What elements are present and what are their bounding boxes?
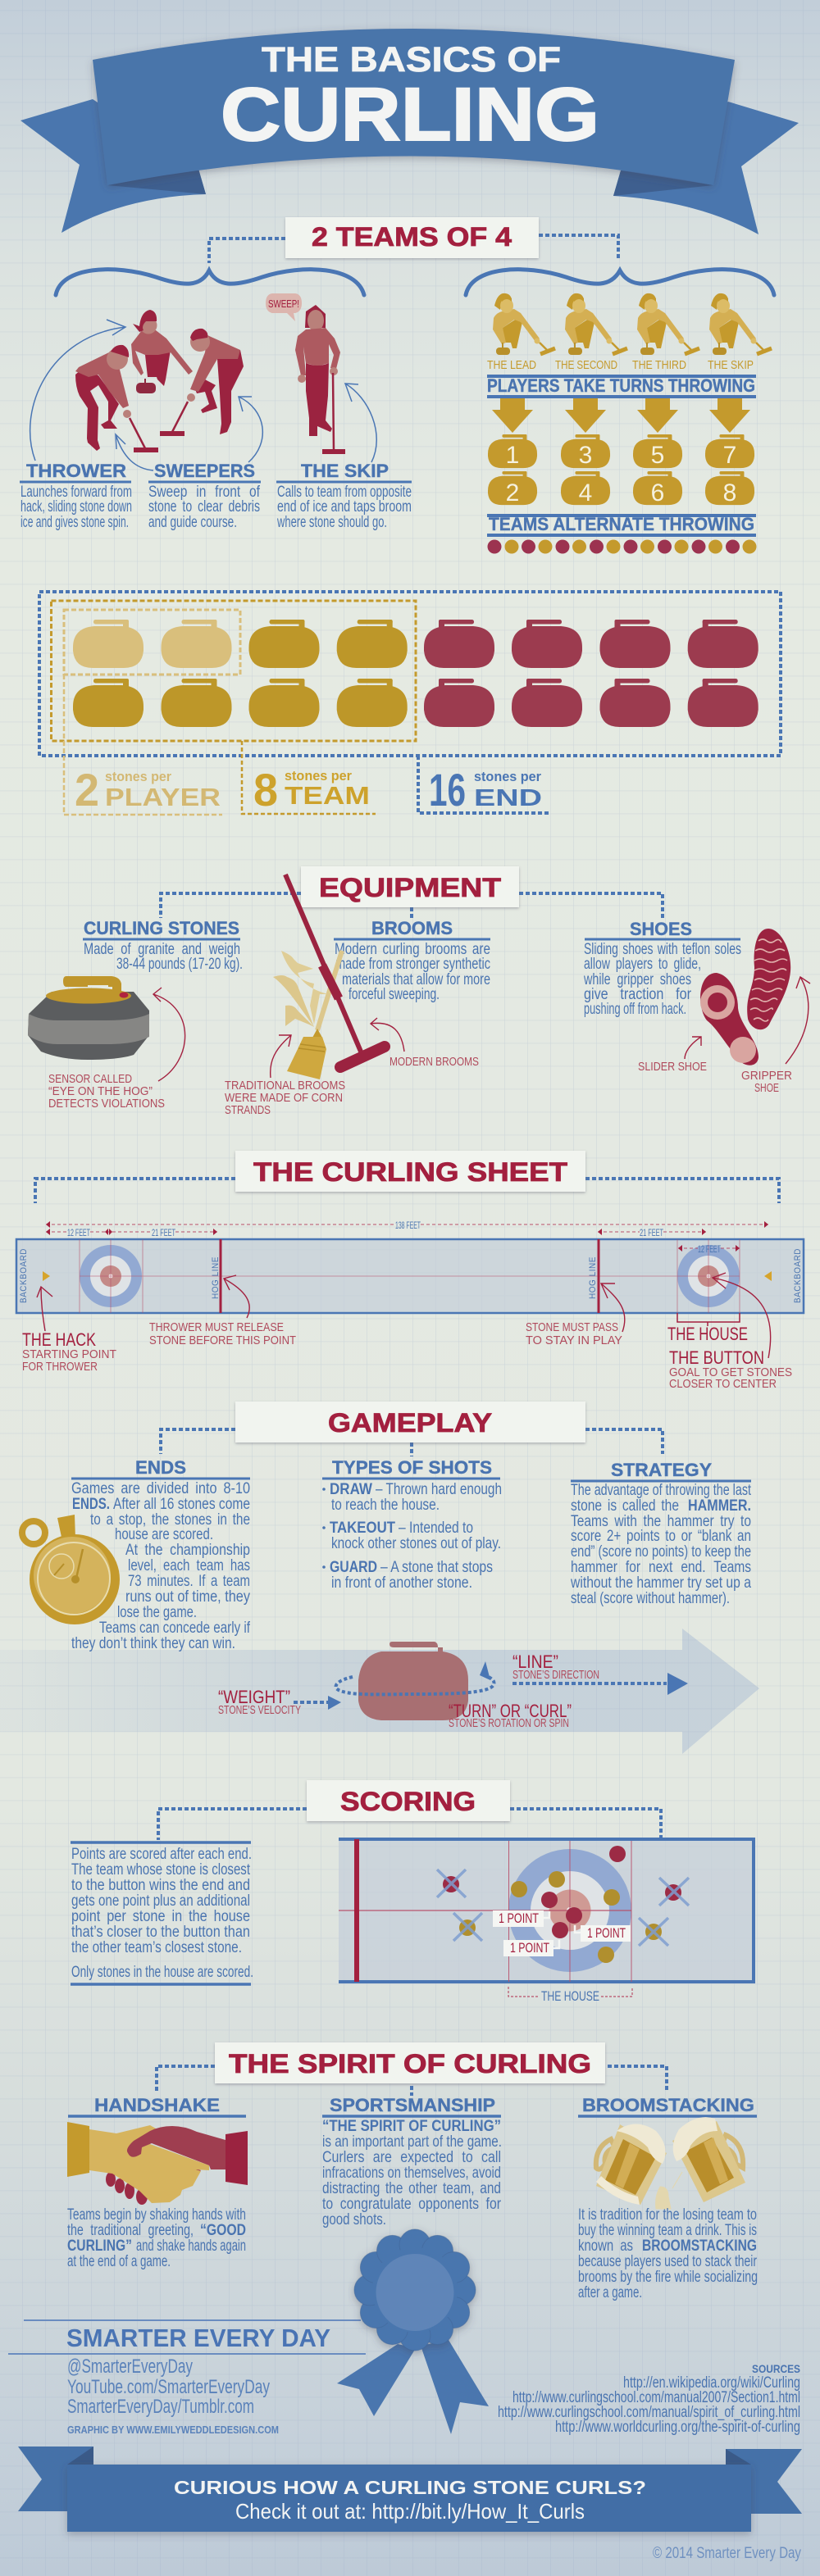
bottom banner xyxy=(18,2447,802,2532)
stat: 8 stones per team xyxy=(253,764,370,816)
text: the skip: THE SKIP xyxy=(301,461,389,481)
callout: traditional brooms: TRADITIONAL BROOMS xyxy=(225,1079,345,1093)
text: types of shots xyxy=(322,1457,502,1592)
text: strategy: Teams with the hammer try to xyxy=(571,1513,751,1530)
text: contact links: SmarterEveryDay/Tumblr.com xyxy=(67,2396,254,2418)
text: sportsmanship: is an important part of the game. xyxy=(322,2133,502,2151)
icon: stopwatch xyxy=(22,1515,120,1624)
text: shoes: allow players to glide, xyxy=(584,956,701,973)
callout: the button: THE BUTTON xyxy=(669,1347,764,1368)
numbered stones: 2 xyxy=(506,479,519,507)
curly brace right xyxy=(466,270,774,295)
label: the house: THE HOUSE xyxy=(541,1988,599,2004)
banner text: Check it out at: http://bit.ly/How_It_Curls xyxy=(235,2499,585,2524)
stat: 2 stones per player xyxy=(75,764,221,816)
house width dimension xyxy=(678,1243,740,1255)
text: ends: Teams can concede early if xyxy=(99,1620,251,1637)
text: brooms xyxy=(334,918,490,1003)
dimension lines: 21 FEET xyxy=(640,1227,663,1238)
text: handshake heading: HANDSHAKE xyxy=(94,2095,220,2115)
callout: modern brooms: MODERN BROOMS xyxy=(390,1055,479,1069)
stat: 16 stones per end: stones per xyxy=(474,769,541,784)
text: brooms: forceful sweeping. xyxy=(348,986,440,1003)
callout: the button xyxy=(669,1273,792,1391)
heading: teams alternate throwing: TEAMS ALTERNATE THROWING xyxy=(489,514,754,534)
callout: stone must pass: TO STAY IN PLAY xyxy=(526,1333,622,1347)
text: types of shots: – Thrown hard enough xyxy=(376,1481,502,1498)
heading: gameplay xyxy=(161,1402,663,1456)
text: curling stones xyxy=(83,918,243,973)
callout: turn or curl: “TURN” OR “CURL” xyxy=(449,1701,572,1721)
callout: slider shoe xyxy=(638,1037,707,1074)
numbered stones: 5 xyxy=(651,442,664,469)
text: types of shots: knock other stones out of play. xyxy=(331,1535,501,1552)
text: sweepers: SWEEPERS xyxy=(154,461,255,481)
callout: weight: “WEIGHT” xyxy=(218,1687,290,1707)
out of house crosses xyxy=(437,1870,689,1946)
text: shoes: pushing off from hack. xyxy=(584,1001,686,1018)
text: ends: runs out of time, they xyxy=(125,1588,250,1606)
text: sportsmanship: “THE SPIRIT OF CURLING” xyxy=(322,2118,501,2135)
heading: the curling sheet: THE CURLING SHEET xyxy=(253,1157,568,1187)
callout: eye on the hog: SENSOR CALLED xyxy=(48,1072,132,1086)
title text xyxy=(221,40,599,157)
callout: the house: THE HOUSE xyxy=(667,1324,748,1344)
callout: the button: CLOSER TO CENTER xyxy=(669,1377,777,1391)
text: strategy: end” (score no points) to keep the xyxy=(571,1543,751,1561)
text: shoes: Sliding shoes with teflon soles xyxy=(584,941,741,958)
icon: beer mugs xyxy=(596,2117,745,2209)
callout: the hack: FOR THROWER xyxy=(22,1360,98,1374)
figure: sweeper one xyxy=(131,310,193,393)
text: scoring rules xyxy=(71,1842,253,1984)
text: scoring rules: point per stone in the house xyxy=(71,1908,250,1925)
title text: THE BASICS OF xyxy=(262,40,561,80)
team figures: THE LEAD xyxy=(487,358,536,372)
alternating stones row xyxy=(487,539,756,554)
text: the skip: Calls to team from opposite xyxy=(277,484,412,501)
text: broomstacking: known as xyxy=(578,2238,633,2255)
hog line labels: BACKBOARD xyxy=(19,1248,29,1303)
banner text: CURIOUS HOW A CURLING STONE CURLS? xyxy=(174,2477,646,2498)
callout: the hack: THE HACK xyxy=(22,1329,96,1350)
direction arrow background xyxy=(0,1629,759,1754)
one point labels: 1 POINT xyxy=(587,1925,626,1941)
callout: release before hog line: STONE BEFORE THIS POINT xyxy=(149,1333,296,1347)
text: thrower: THROWER xyxy=(26,461,126,481)
icon: blue ribbon rosette xyxy=(337,2229,489,2434)
text: sportsmanship xyxy=(322,2095,502,2228)
text: scoring rules: gets one point plus an additional xyxy=(71,1892,250,1910)
text: shoes: while gripper shoes xyxy=(583,971,691,988)
text: sweepers: and guide course. xyxy=(148,514,237,531)
callout: gripper shoe: GRIPPER xyxy=(741,1069,792,1083)
text: ends: After all 16 stones come xyxy=(113,1496,250,1513)
callout: line xyxy=(512,1651,688,1695)
text: sportsmanship: Curlers are expected to call xyxy=(322,2149,501,2166)
text: sportsmanship: distracting the other team, and xyxy=(322,2180,501,2197)
text: scoring rules: that’s closer to the button than xyxy=(71,1924,250,1941)
text: handshake xyxy=(67,2206,246,2270)
callout: eye on the hog: DETECTS VIOLATIONS xyxy=(48,1097,165,1111)
text: broomstacking: BROOMSTACKING xyxy=(642,2238,757,2255)
text: ends: Games are divided into 8-10 xyxy=(71,1480,250,1497)
diagram: scoring house xyxy=(339,1839,754,1982)
dimension lines xyxy=(46,1220,768,1238)
text: contact links: YouTube.com/SmarterEveryDay xyxy=(67,2376,270,2398)
text: types of shots: GUARD xyxy=(330,1559,377,1576)
house: right xyxy=(677,1245,740,1307)
text: scoring rules: the other team’s closest stone. xyxy=(71,1939,242,1956)
callout: weight xyxy=(218,1687,341,1717)
text: brooms: made from stronger synthetic xyxy=(335,956,490,973)
text: shoes xyxy=(583,919,741,1018)
text: handshake: Teams begin by shaking hands with xyxy=(67,2206,246,2224)
callout: line: “LINE” xyxy=(512,1651,558,1672)
text: handshake: and shake hands again xyxy=(136,2238,246,2255)
one point labels xyxy=(493,1910,631,1956)
icon: curling stone xyxy=(28,976,149,1060)
numbered stones: 8 xyxy=(723,479,736,507)
callout: turn or curl: STONE’S ROTATION OR SPIN xyxy=(449,1716,569,1730)
stat: 8 stones per team: TEAM xyxy=(285,781,370,810)
text: ends: lose the game. xyxy=(117,1604,197,1621)
text: sportsmanship: SPORTSMANSHIP xyxy=(330,2095,495,2115)
title text: CURLING xyxy=(221,73,599,157)
callout: stone must pass: STONE MUST PASS xyxy=(526,1320,618,1334)
callout: stone must pass xyxy=(526,1283,625,1347)
callout: traditional brooms: WERE MADE OF CORN xyxy=(225,1091,343,1105)
stat: 2 stones per player: PLAYER xyxy=(105,783,221,811)
numbered stones: 1 xyxy=(506,442,519,469)
text: shoes: give traction for xyxy=(584,986,692,1003)
text: broomstacking xyxy=(578,2206,758,2301)
text: ends: 73 minutes. If a team xyxy=(128,1573,250,1590)
text: contact links: @SmarterEveryDay xyxy=(67,2356,193,2378)
callout: weight: STONE’S VELOCITY xyxy=(218,1703,301,1717)
hog line labels: HOG LINE xyxy=(211,1256,221,1299)
text: strategy: stone is called the xyxy=(571,1497,679,1515)
brand: smarter every day xyxy=(8,2320,366,2354)
diagram: curling sheet xyxy=(16,1239,804,1313)
stat: 16 stones per end xyxy=(429,764,542,816)
text: sources xyxy=(498,2362,800,2436)
text: graphic credit: GRAPHIC BY WWW.EMILYWEDDLEDESIGN.COM xyxy=(67,2424,279,2436)
text: handshake: at the end of a game. xyxy=(67,2253,171,2270)
text: brooms: Modern curling brooms are xyxy=(335,941,490,958)
heading: the spirit of curling xyxy=(157,2042,667,2096)
team figures xyxy=(487,293,772,372)
text: ends: to a stop, the stones in the xyxy=(90,1511,250,1529)
text: strategy: HAMMER. xyxy=(688,1497,751,1515)
heading: scoring xyxy=(158,1780,661,1840)
stat: 2 stones per player: 2 xyxy=(75,764,99,816)
callout: traditional brooms: STRANDS xyxy=(225,1103,271,1117)
heading: the curling sheet xyxy=(35,1151,779,1203)
speech bubble: sweep: SWEEP! xyxy=(268,298,299,310)
house: left xyxy=(80,1245,142,1307)
text: types of shots: to reach the house. xyxy=(331,1497,440,1514)
callout: traditional brooms xyxy=(225,1035,345,1117)
label: the house xyxy=(508,1987,632,2004)
callout: slider shoe: SLIDER SHOE xyxy=(638,1060,707,1074)
figure: thrower xyxy=(75,345,158,452)
text: strategy: score 2+ points to or “blank an xyxy=(571,1528,751,1545)
icon: handshake xyxy=(67,2122,248,2205)
figure: sweeper two xyxy=(160,329,244,436)
text: ends: ENDS xyxy=(135,1457,186,1478)
text: the skip xyxy=(276,461,412,531)
heading: players take turns throwing: PLAYERS TAKE TURNS THROWING xyxy=(487,375,755,396)
callout: gripper shoe: SHOE xyxy=(754,1081,779,1095)
team figures: THE SECOND xyxy=(555,358,617,372)
text: broomstacking: after a game. xyxy=(578,2284,642,2301)
numbered stones: 3 xyxy=(579,442,592,469)
stat: 8 stones per team: stones per xyxy=(285,768,352,784)
numbered stones: 4 xyxy=(579,479,592,507)
text: broomstacking: brooms by the fire while socializing xyxy=(578,2269,758,2286)
text: ends: ENDS. xyxy=(72,1496,110,1513)
house width dimension: 12 FEET xyxy=(698,1243,721,1255)
callout: line: STONE’S DIRECTION xyxy=(512,1668,599,1682)
text: types of shots: TYPES OF SHOTS xyxy=(332,1457,492,1478)
heading: the spirit of curling: THE SPIRIT OF CURLING xyxy=(229,2049,591,2079)
banner text xyxy=(174,2477,646,2524)
text: strategy: hammer for next end. Teams xyxy=(571,1559,751,1576)
callout: turn or curl xyxy=(449,1701,572,1730)
text: handshake: “GOOD xyxy=(200,2222,246,2239)
text: types of shots: DRAW xyxy=(330,1481,372,1498)
figure: the skip xyxy=(295,305,345,454)
stones: team gold xyxy=(73,620,408,727)
heading: gameplay: GAMEPLAY xyxy=(328,1408,492,1438)
brand: smarter every day: SMARTER EVERY DAY xyxy=(66,2324,330,2352)
icon: slider shoe xyxy=(700,973,758,1065)
text: brooms: materials that allow for more xyxy=(342,971,490,988)
heading: scoring: SCORING xyxy=(340,1787,476,1816)
stat: 8 stones per team: 8 xyxy=(253,764,278,816)
hog line labels xyxy=(19,1248,803,1303)
callout: eye on the hog: “EYE ON THE HOG” xyxy=(48,1084,153,1098)
hog lines xyxy=(221,1239,599,1313)
text: ends: At the championship xyxy=(125,1542,250,1559)
dimension lines: 138 FEET xyxy=(395,1220,421,1231)
text: scoring rules: to the button wins the end and xyxy=(71,1877,250,1894)
stat: 16 stones per end: END xyxy=(474,785,542,811)
text: handshake: CURLING” xyxy=(67,2238,132,2255)
text: types of shots: – A stone that stops xyxy=(380,1559,493,1576)
heading: 2 teams of 4 xyxy=(209,217,618,263)
text: shoes: SHOES xyxy=(630,919,692,939)
text: ends: house are scored. xyxy=(115,1526,213,1543)
text: the skip: end of ice and taps broom xyxy=(277,498,412,516)
hog line labels: HOG LINE xyxy=(588,1256,598,1299)
text: broomstacking: because players used to stack their xyxy=(578,2253,757,2270)
icon: traditional corn broom xyxy=(273,951,342,1079)
text: broomstacking heading: BROOMSTACKING xyxy=(582,2095,754,2115)
title banner xyxy=(20,29,799,234)
icon: modern broom xyxy=(285,875,385,1067)
text: thrower xyxy=(20,461,132,531)
dimension lines: 21 FEET xyxy=(152,1227,175,1238)
text: ends: level, each team has xyxy=(128,1557,250,1574)
stat: 16 stones per end: 16 xyxy=(429,764,466,816)
text: strategy: STRATEGY xyxy=(611,1460,712,1480)
text: ends xyxy=(71,1457,251,1652)
callout: the hack: STARTING POINT xyxy=(22,1347,116,1361)
panel: stones per game diagram xyxy=(39,592,781,815)
callout: eye on the hog xyxy=(48,988,185,1111)
stones: player xyxy=(73,620,231,668)
crimson stones xyxy=(443,1846,681,1938)
text: the skip: where stone should go. xyxy=(276,514,387,531)
callout: gripper shoe xyxy=(741,977,810,1095)
numbered stones xyxy=(488,434,754,507)
callout: modern brooms xyxy=(371,1018,479,1069)
icon: gripper shoe xyxy=(747,929,790,1029)
hog line labels: BACKBOARD xyxy=(793,1248,803,1303)
text: strategy: The advantage of throwing the last xyxy=(571,1482,752,1499)
one point labels: 1 POINT xyxy=(510,1940,549,1956)
numbered stones: 6 xyxy=(651,479,664,507)
one point labels: 1 POINT xyxy=(499,1910,539,1926)
stones: opposing team crimson xyxy=(424,620,758,727)
text: curling stones: CURLING STONES xyxy=(84,918,239,938)
text: sources: SOURCES xyxy=(752,2362,800,2375)
text: strategy xyxy=(570,1460,752,1607)
text: thrower: Launches forward from xyxy=(20,484,132,501)
speech bubble: sweep xyxy=(266,293,302,321)
callout: the hack xyxy=(22,1287,116,1374)
team figures: THE THIRD xyxy=(632,358,686,372)
text: sweepers xyxy=(148,461,261,531)
icon: stone in motion xyxy=(336,1642,494,1720)
text: broomstacking: It is tradition for the losing team to xyxy=(578,2206,757,2224)
curly brace left xyxy=(56,270,364,295)
text: scoring rules: Points are scored after each end. xyxy=(71,1846,252,1863)
numbered stones: 7 xyxy=(723,442,736,469)
team figures: THE SKIP xyxy=(708,358,754,372)
text: sweepers: stone to clear debris xyxy=(148,498,260,516)
text: sweepers: Sweep in front of xyxy=(148,484,261,501)
text: types of shots: in front of another stone. xyxy=(331,1574,472,1592)
text: thrower: ice and gives stone spin. xyxy=(20,514,129,531)
text: sportsmanship: to congratulate opponents for xyxy=(322,2196,502,2213)
text: ends: they don’t think they can win. xyxy=(71,1635,235,1652)
stat: 2 stones per player: stones per xyxy=(105,769,171,784)
text: types of shots: – Intended to xyxy=(399,1520,473,1537)
text: curling stones: 38-44 pounds (17-20 kg). xyxy=(116,956,243,973)
text: thrower: hack, sliding stone down xyxy=(20,498,132,516)
text: curling stones: Made of granite and weigh xyxy=(84,941,240,958)
hacks xyxy=(43,1271,772,1281)
text: sportsmanship: infracations on themselves, avoid xyxy=(322,2165,501,2182)
arrows: throwing order xyxy=(492,398,750,433)
callout: release before hog line: THROWER MUST RELEASE xyxy=(149,1320,284,1334)
text: strategy: steal (score without hammer). xyxy=(571,1590,730,1607)
text: scoring rules: The team whose stone is closest xyxy=(71,1861,251,1879)
text: contact links xyxy=(67,2356,270,2418)
text: handshake: the traditional greeting, xyxy=(67,2222,194,2239)
text: brooms: BROOMS xyxy=(371,918,453,938)
arrows: role pointers xyxy=(30,320,376,470)
text: sportsmanship: good shots. xyxy=(322,2211,386,2228)
heading: equipment xyxy=(161,866,663,920)
heading: 2 teams of 4: 2 TEAMS OF 4 xyxy=(312,222,512,252)
heading: equipment: EQUIPMENT xyxy=(319,873,502,902)
text: scoring rules: Only stones in the house are scored. xyxy=(71,1964,253,1981)
text: strategy: without the hammer try set up a xyxy=(570,1574,751,1592)
callout: the button: GOAL TO GET STONES xyxy=(669,1365,792,1379)
callout: the house xyxy=(667,1313,748,1344)
gold stones xyxy=(459,1871,662,1963)
text: types of shots: TAKEOUT xyxy=(330,1520,395,1537)
callout: release before hog line xyxy=(149,1275,296,1347)
dimension lines: 12 FEET xyxy=(67,1227,90,1238)
